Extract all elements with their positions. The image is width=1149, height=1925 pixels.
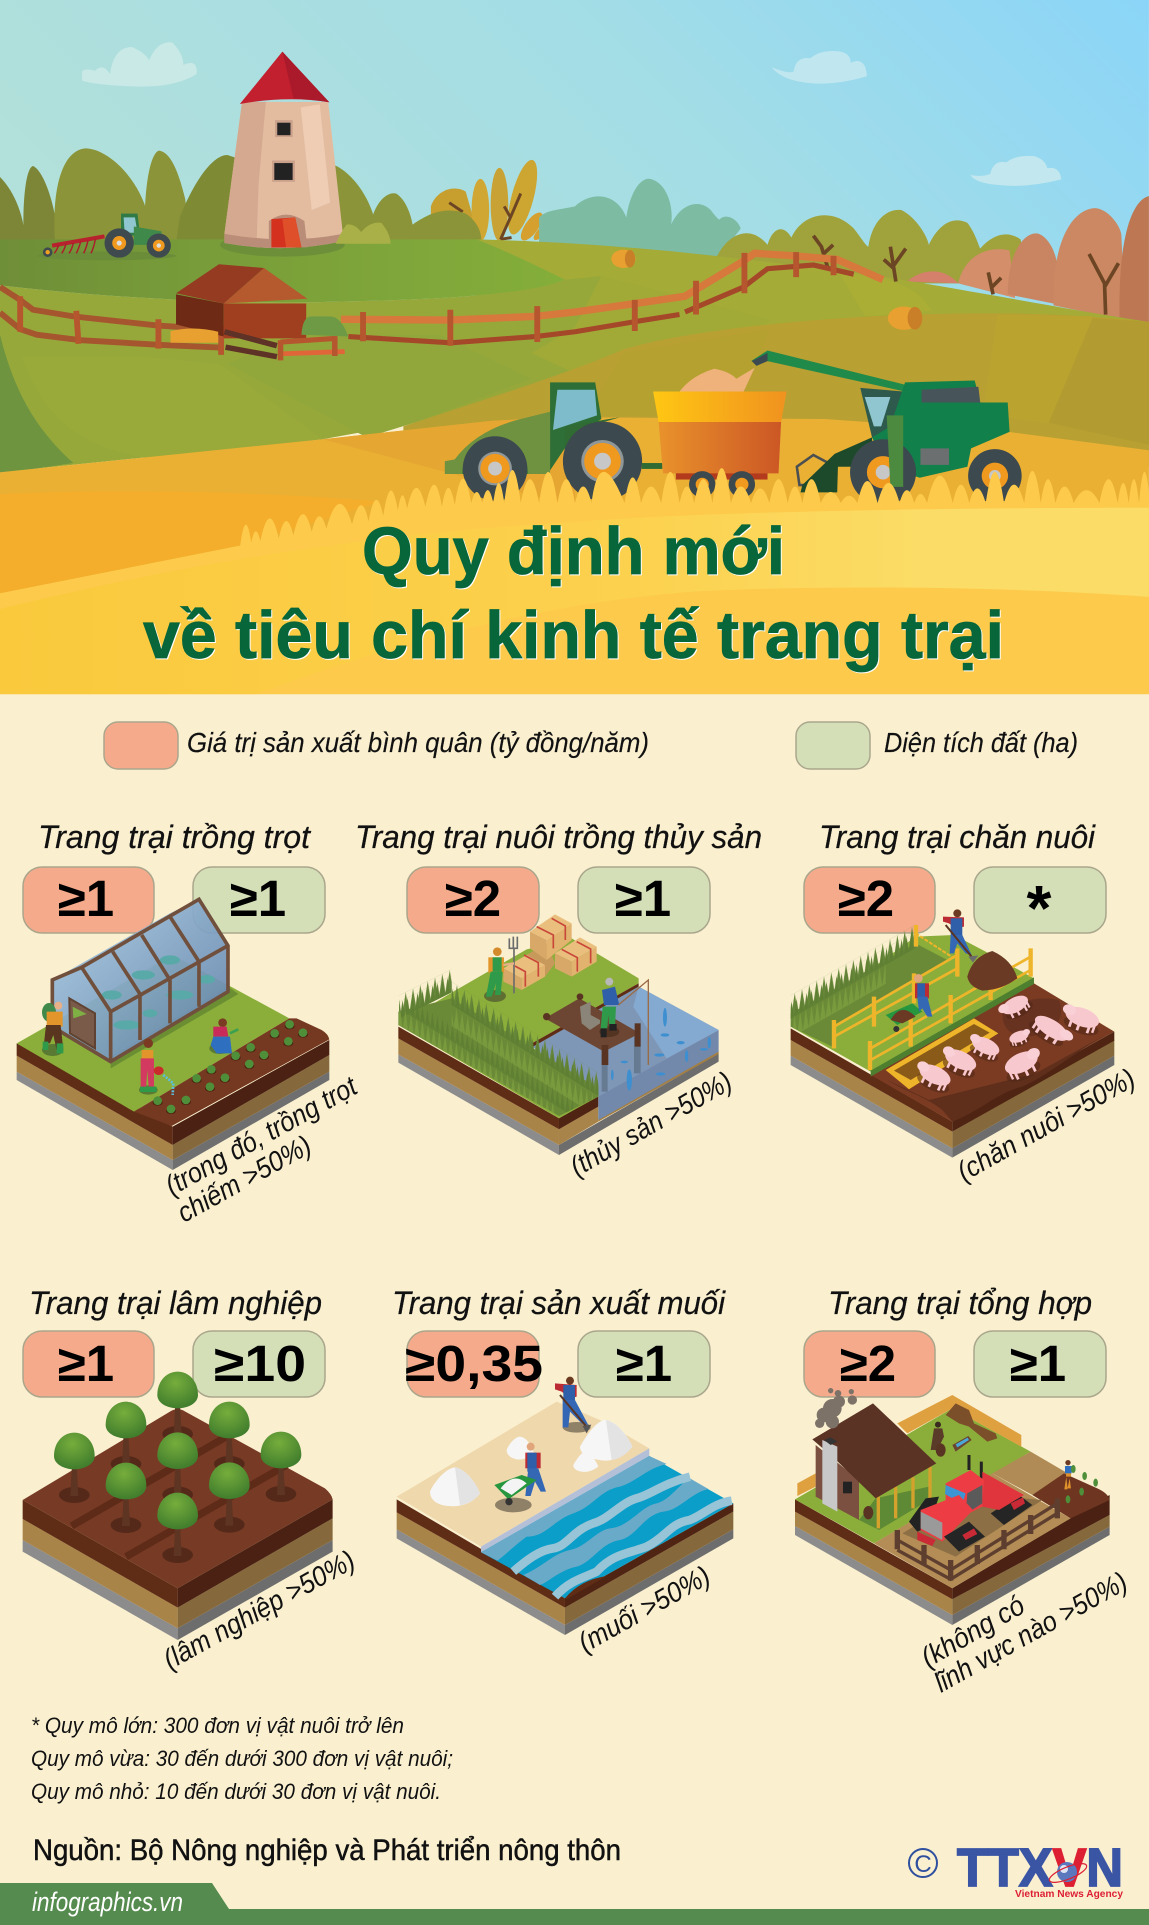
fish [611, 1008, 711, 1091]
bank soil [565, 1576, 607, 1599]
tall grass [791, 925, 947, 1047]
note: lĩnh vực nào >50%) [929, 1566, 1132, 1698]
panel: crop farm [17, 819, 363, 1228]
trees [54, 1372, 301, 1563]
value pill: ≥0,35 [405, 1335, 543, 1392]
area pill: * [1027, 872, 1052, 944]
value pill: ≥2 [838, 870, 894, 927]
note: (lâm nghiệp >50%) [158, 1544, 360, 1675]
legend swatch: production value [104, 722, 178, 769]
copyright mark: C [914, 1851, 932, 1878]
teal distant trees [539, 179, 741, 261]
bare trees [813, 236, 1118, 315]
globe with orbit [1047, 1860, 1089, 1886]
clouds [82, 42, 1061, 186]
area pill [974, 867, 1106, 944]
footnotes [31, 1713, 453, 1804]
mud patches [887, 1037, 1102, 1122]
area pill: ≥1 [615, 870, 671, 927]
worker with sack [42, 1002, 63, 1056]
hay bale on hillside [888, 306, 922, 330]
area pill: ≥1 [616, 1335, 672, 1392]
source: Nguồn: Bộ Nông nghiệp và Phát triển nông thôn [33, 1834, 621, 1867]
value pill [804, 867, 935, 933]
barn-side fence and bush [224, 316, 348, 360]
isometric livestock block [791, 909, 1114, 1158]
waves [513, 1477, 690, 1572]
area pill [193, 867, 325, 933]
worker with barrow [494, 1443, 546, 1512]
panel: salt farm [392, 1285, 733, 1658]
heading: Trang trại tổng hợp [828, 1285, 1092, 1321]
area pill [578, 1331, 710, 1397]
wheat stalk band [0, 468, 1149, 694]
value pill [407, 867, 539, 933]
hero farm scene [0, 0, 1149, 694]
footnotes: Quy mô nhỏ: 10 đến dưới 30 đơn vị vật nuôi. [31, 1779, 441, 1804]
note: chiếm >50%) [172, 1129, 316, 1228]
area pill: ≥1 [1010, 1335, 1066, 1392]
worker with shovel [943, 909, 978, 963]
terracotta trees [907, 196, 1149, 327]
value pill [23, 1331, 154, 1397]
blacksmith and trough [931, 1422, 972, 1457]
note: (trong đó, trồng trọt [160, 1070, 363, 1201]
left olive trees [0, 148, 413, 243]
area pill [974, 1331, 1106, 1397]
value pill: ≥2 [445, 870, 501, 927]
crates [503, 914, 597, 990]
value pill [804, 1331, 935, 1397]
area pill: ≥1 [230, 870, 286, 927]
panel: livestock farm [791, 819, 1140, 1187]
red barn [171, 264, 307, 343]
note: (muối >50%) [573, 1560, 715, 1658]
pen fence [897, 1498, 1057, 1581]
note: (thủy sản >50%) [565, 1066, 737, 1182]
wood pile [946, 1403, 997, 1442]
salt piles [430, 1420, 632, 1506]
heading: Trang trại trồng trọt [38, 819, 311, 855]
grass strip [791, 935, 1034, 1072]
feeding trough [886, 1018, 998, 1089]
agency name: Vietnam News Agency [1015, 1888, 1123, 1900]
red tractor [909, 1455, 1032, 1552]
tall reeds [397, 969, 598, 1128]
sky [0, 0, 1149, 403]
isometric mixed farm block [795, 1388, 1110, 1625]
note: (không có [916, 1589, 1030, 1673]
isometric forest block [23, 1372, 333, 1640]
footer bar with site tab [0, 1883, 1149, 1925]
light yellow field [0, 508, 1149, 694]
fences [834, 925, 1031, 1070]
panel: forestry farm [23, 1285, 360, 1675]
TTXVN logo: TTXVN [957, 1838, 1123, 1898]
title: Quy định mới [362, 514, 785, 589]
heading: Trang trại chăn nuôi [819, 819, 1096, 855]
panel: mixed farm [795, 1285, 1132, 1698]
back fence [797, 1395, 1021, 1496]
small tractor with plough [43, 214, 171, 258]
title: về tiêu chí kinh tế trang trại [143, 598, 1004, 673]
kneeling worker [209, 1018, 238, 1054]
windmill tower [224, 52, 343, 248]
front olive shrub [407, 210, 481, 243]
area pill: ≥10 [214, 1335, 306, 1392]
farmer and seedlings [1064, 1460, 1098, 1503]
isometric pond block [397, 914, 719, 1155]
gold fields [0, 416, 1149, 694]
soil pile [967, 951, 1017, 991]
pigs [910, 991, 1104, 1097]
value pill: ≥1 [58, 870, 114, 927]
crop rows [153, 1020, 308, 1114]
upper green hill and far olive hill [0, 233, 1149, 467]
isometric greenhouse block [17, 899, 329, 1170]
chimney smoke [815, 1388, 857, 1428]
combine harvester [751, 350, 1022, 505]
heading: Trang trại nuôi trồng thủy sản [355, 819, 762, 855]
legend swatch: land area [796, 722, 870, 769]
water patches [481, 1456, 667, 1561]
value pill: ≥1 [58, 1335, 114, 1392]
right olive trees [716, 210, 1030, 283]
value pill [23, 867, 154, 933]
wooden fence [0, 252, 883, 355]
legend [104, 722, 1078, 769]
lower green hill [0, 276, 770, 474]
legend text: production value: Giá trị sản xuất bình quân (tỷ đồng/năm) [187, 727, 649, 758]
heading: Trang trại sản xuất muối [392, 1285, 726, 1321]
site name: infographics.vn [32, 1887, 183, 1917]
title [143, 514, 1004, 673]
footnotes: Quy mô vừa: 30 đến dưới 300 đơn vị vật nuôi; [31, 1746, 453, 1771]
worker watering [139, 1039, 173, 1095]
value pill: ≥2 [840, 1335, 896, 1392]
isometric salt field block [397, 1377, 733, 1635]
hay bale on far hill [611, 250, 636, 268]
small shrub at tower [336, 223, 391, 244]
legend text: land area: Diện tích đất (ha) [884, 727, 1078, 758]
worker with pitchfork [484, 937, 517, 1002]
copyright mark [909, 1849, 937, 1878]
grain trailer [653, 368, 787, 498]
worker with shovel [555, 1377, 591, 1433]
worker with barrow [886, 974, 932, 1032]
fisherman [599, 978, 648, 1065]
area pill [578, 867, 710, 933]
yellow autumn bushes [431, 157, 556, 244]
pier [543, 993, 641, 1092]
heading: Trang trại lâm nghiệp [29, 1285, 322, 1321]
panel: aquaculture farm [355, 819, 762, 1182]
big green tractor [445, 382, 662, 501]
footnotes: * Quy mô lớn: 300 đơn vị vật nuôi trở lên [31, 1713, 404, 1738]
house [812, 1403, 936, 1530]
greenhouse [52, 899, 228, 1062]
ochre hillside [403, 313, 1149, 467]
area pill [193, 1331, 325, 1397]
